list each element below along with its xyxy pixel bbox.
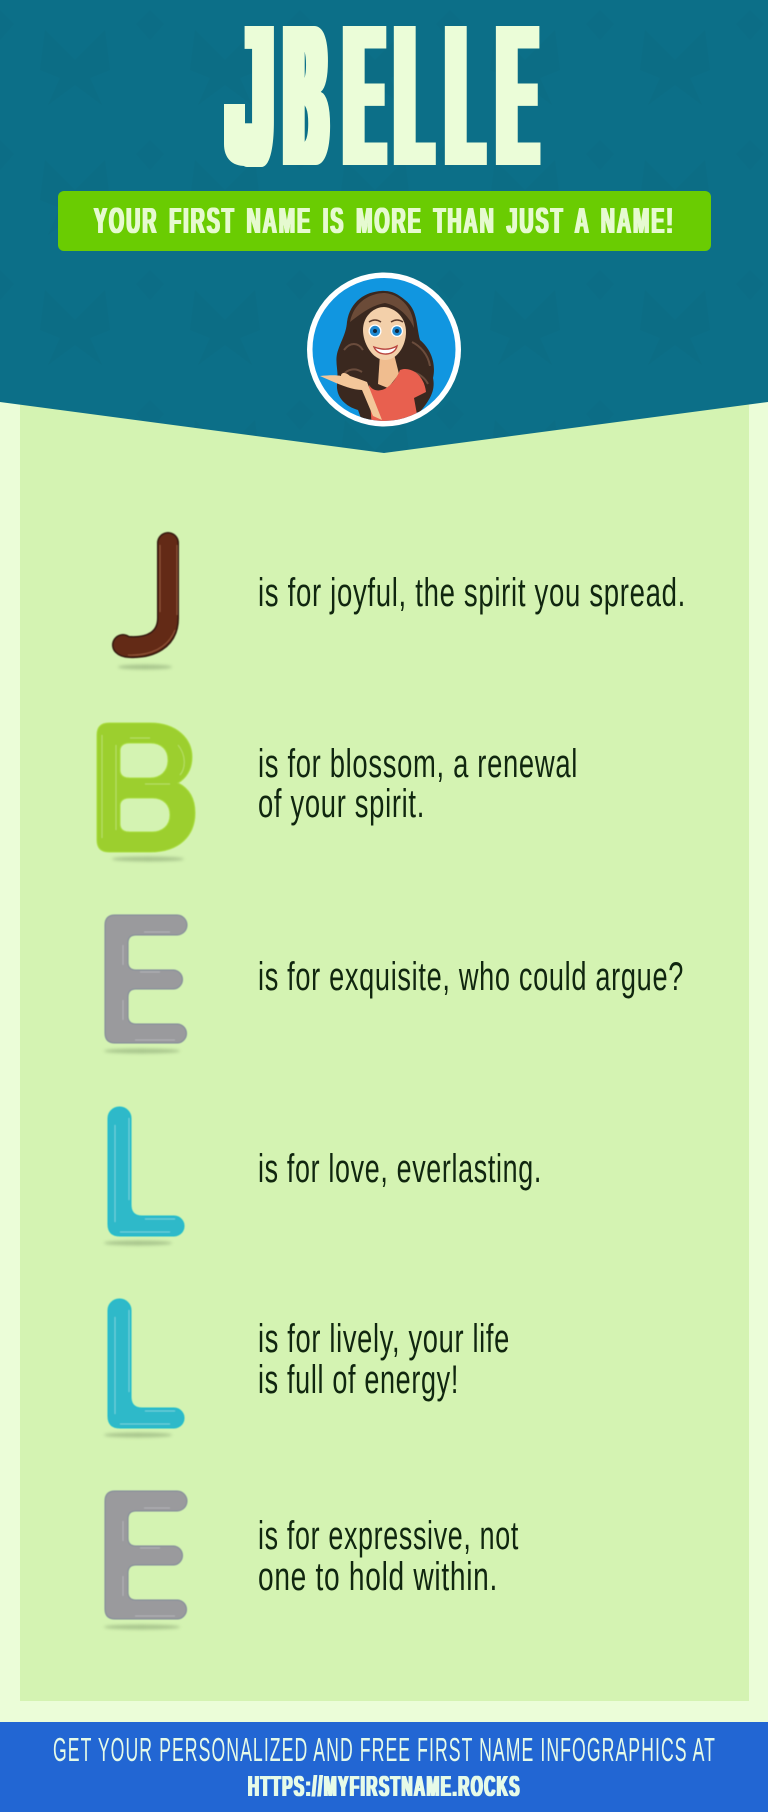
banner: [58, 191, 711, 251]
text: E second lines: one to hold within.: [258, 1555, 498, 1599]
row: L: [104, 1107, 542, 1246]
panel: letters panel: [20, 402, 749, 1701]
text: L second lines: is for lively, your life: [258, 1317, 510, 1361]
text: B lines: of your spirit.: [258, 782, 425, 826]
icon: letter L second: [104, 1299, 184, 1438]
face: [363, 307, 406, 360]
panel: teal header: [0, 0, 768, 453]
text: L second lines: is full of energy!: [258, 1358, 459, 1402]
hair: [336, 291, 434, 421]
neck: [378, 354, 399, 388]
text: B lines: is for blossom, a renewal: [258, 742, 578, 786]
icon: letter B: [97, 723, 195, 862]
avatar: woman in circle: [307, 272, 461, 430]
row: E second: [104, 1491, 519, 1630]
icon: letter L: [104, 1107, 184, 1246]
row: J: [118, 543, 686, 670]
text: L second lines: [258, 1317, 510, 1402]
icon: letter J: [118, 543, 177, 670]
mouth: [374, 346, 397, 354]
icon: letter E second: [104, 1491, 187, 1630]
text: E second lines: is for expressive, not: [258, 1514, 519, 1558]
text: B lines: [258, 742, 578, 826]
footer url: HTTPS://MYFIRSTNAME.ROCKS: [248, 1771, 521, 1803]
footer: [0, 1722, 768, 1812]
row: B: [97, 723, 578, 862]
eyes: [369, 320, 403, 322]
text: E second lines: [258, 1514, 519, 1599]
row: E: [104, 915, 684, 1054]
row: L second: [104, 1299, 510, 1438]
icon: letter E: [104, 915, 187, 1054]
text: L line: is for love, everlasting.: [258, 1147, 542, 1191]
shirt: [369, 369, 426, 421]
arm and hand: [320, 373, 382, 420]
